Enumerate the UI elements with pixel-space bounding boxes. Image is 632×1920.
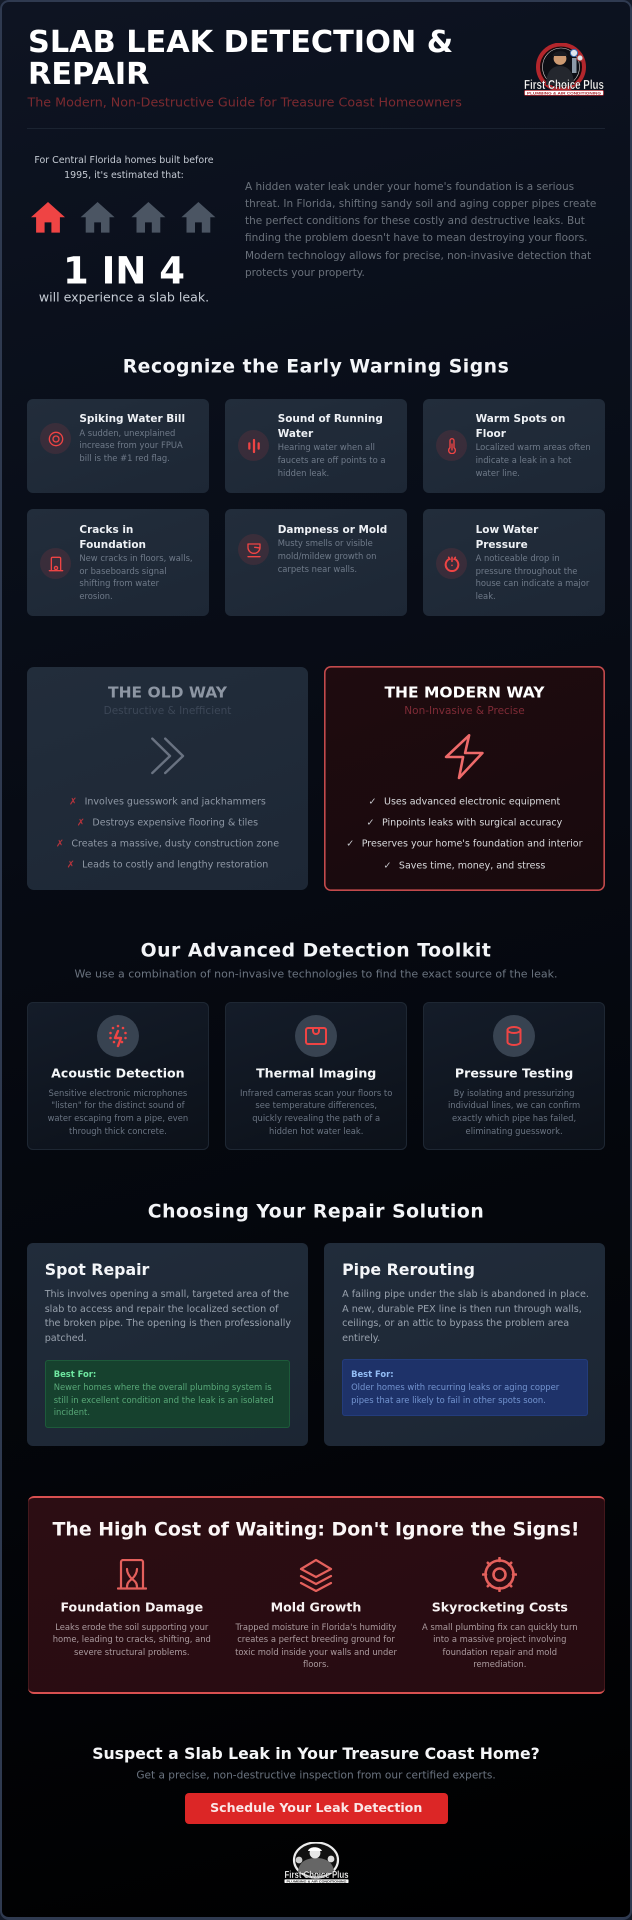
modern way list: ✓ Saves time, money, and stress: [383, 860, 545, 871]
modern way list: ✓ Preserves your home's foundation and interior: [346, 839, 583, 850]
stat block: 1 in 4: [31, 155, 216, 304]
panel: the modern way: [324, 666, 605, 891]
modern way list: ✓ Uses advanced electronic equipment: [369, 796, 560, 807]
panel: high cost of waiting: [28, 1496, 605, 1694]
cost item text: creates a perfect breeding ground for: [237, 1634, 395, 1644]
solution text: [342, 1289, 589, 1344]
card title: Water: [278, 428, 313, 440]
solution text: the broken pipe. The opening is then professionally: [45, 1318, 291, 1329]
button: schedule: Schedule Your Leak Detection: [210, 1800, 422, 1815]
cost item text: [422, 1622, 578, 1669]
icon: foundation: [40, 548, 71, 579]
card text: faucets are off points to a: [278, 455, 386, 465]
best for: blue callout: Best For:: [351, 1369, 394, 1379]
heading: repair solution: Choosing Your Repair Solution: [148, 1201, 484, 1222]
tool text: water escaping from a pipe, even: [48, 1113, 188, 1123]
solution text: This involves opening a small, targeted area of the: [45, 1289, 289, 1300]
card title: Cracks in: [79, 524, 133, 536]
cost item title: Foundation Damage: [60, 1600, 203, 1615]
intro paragraph: protects your property.: [245, 267, 365, 279]
tool text: [448, 1088, 580, 1136]
tool text: quickly revealing the path of a: [252, 1113, 380, 1123]
cost item text: remediation.: [473, 1659, 526, 1669]
tool text: [48, 1088, 188, 1136]
logo: First Choice Plus: PLUMBING & AIR CONDITIONING: [527, 91, 601, 95]
icon: acoustic sensor: [97, 1015, 139, 1057]
card text: [79, 553, 193, 601]
best for: green callout: [45, 1360, 290, 1428]
call to action text: Get a precise, non-destructive inspection from our certified experts.: [136, 1770, 496, 1782]
intro paragraph: the perfect conditions for these costly and destructive leaks. But: [245, 215, 585, 227]
card: acoustic detection: [27, 1002, 209, 1150]
modern way list: ✓ Pinpoints leaks with surgical accuracy: [366, 818, 562, 829]
header title: [28, 25, 453, 92]
card text: [79, 428, 183, 463]
card title: Pressure: [476, 539, 528, 551]
best for: green callout: incident.: [54, 1407, 90, 1417]
tool text: Infrared cameras scan your floors to: [240, 1088, 392, 1098]
card text: water line.: [476, 468, 520, 478]
intro paragraph: Modern technology allows for precise, non-invasive detection that: [245, 250, 591, 262]
card text: shifting from water: [79, 578, 159, 588]
tool text: individual lines, we can confirm: [448, 1100, 580, 1110]
card text: hidden leak.: [278, 468, 329, 478]
panel: spot repair: [27, 1243, 308, 1446]
card text: mold/mildew growth on: [278, 551, 376, 561]
cost item text: Leaks erode the soil supporting your: [55, 1622, 208, 1632]
panel: the old way: [27, 667, 308, 890]
card text: A noticeable drop in: [476, 553, 560, 563]
tool text: "listen" for the distinct sound of: [51, 1100, 185, 1110]
tool title: Pressure Testing: [455, 1066, 573, 1081]
solution text: ceilings, or an attic to bypass the problem area: [342, 1318, 569, 1329]
icon: double chevron: [151, 737, 184, 774]
card text: leak.: [476, 591, 496, 601]
card text: house can indicate a major: [476, 578, 589, 588]
cost heading: The High Cost of Waiting: Don't Ignore the Signs!: [52, 1519, 579, 1541]
card title: [79, 524, 146, 551]
stat intro text: For Central Florida homes built before: [34, 155, 214, 166]
old way list: ✗ Leads to costly and lengthy restoration: [67, 859, 268, 870]
tool text: exactly which pipe has failed,: [452, 1113, 576, 1123]
intro paragraph: finding the problem doesn't have to mean destroying your floors.: [245, 232, 588, 244]
header subtitle: The Modern, Non-Destructive Guide for Treasure Coast Homeowners: [28, 95, 462, 110]
icon: gear: [482, 1557, 517, 1592]
card text: New cracks in floors, walls,: [79, 553, 193, 563]
card text: Musty smells or visible: [278, 538, 373, 548]
tool title: Thermal Imaging: [256, 1066, 376, 1081]
cost item text: Trapped moisture in Florida's humidity: [236, 1622, 396, 1632]
best for: green callout: Newer homes where the overall plumbing system is: [54, 1382, 272, 1392]
intro paragraph: [245, 181, 596, 279]
cost item text: home, leading to cracks, shifting, and: [53, 1634, 211, 1644]
best for: blue callout: Older homes with recurring leaks or aging copper: [351, 1382, 559, 1392]
toolkit subheading: We use a combination of non-invasive technologies to find the exact source of the leak.: [75, 968, 557, 981]
button: schedule: [185, 1793, 448, 1824]
card text: indicate a leak in a hot: [476, 455, 571, 465]
card: pressure testing: [423, 1002, 605, 1150]
card: low water pressure: [423, 509, 605, 616]
icon: pressure gauge: [436, 548, 467, 579]
card text: [476, 553, 590, 601]
card text: carpets near walls.: [278, 564, 357, 574]
card title: Warm Spots on: [476, 413, 565, 425]
card: warm spots: [423, 399, 605, 493]
stat caption: will experience a slab leak.: [39, 290, 209, 304]
card title: [278, 413, 383, 440]
intro paragraph: A hidden water leak under your home's foundation is a serious: [245, 181, 574, 193]
modern way subtitle: Non-Invasive & Precise: [404, 705, 525, 717]
old way subtitle: Destructive & Inefficient: [104, 704, 231, 716]
cost item text: severe structural problems.: [74, 1647, 190, 1657]
card title: Dampness or Mold: [278, 524, 387, 536]
header title: REPAIR: [28, 57, 150, 92]
card title: Spiking Water Bill: [79, 413, 185, 425]
tool text: [240, 1088, 392, 1136]
best for: blue callout: pipes that are likely to fail in other spots soon.: [351, 1395, 546, 1405]
card title: [476, 524, 538, 551]
stat number: 1 IN 4: [63, 250, 185, 292]
card: spiking water bill: [27, 399, 209, 493]
cost item text: toxic mold inside your walls and under: [235, 1647, 397, 1657]
card: cracks in foundation: [27, 509, 209, 616]
card title: Low Water: [476, 524, 538, 536]
card title: Foundation: [79, 539, 146, 551]
card text: or baseboards signal: [79, 566, 167, 576]
cost item title: Skyrocketing Costs: [432, 1600, 568, 1615]
best for: green callout: still in excellent condition and the leak is an isolated: [54, 1395, 274, 1405]
intro paragraph: threat. In Florida, shifting sandy soil and aging copper pipes create: [245, 198, 596, 210]
card text: [278, 442, 386, 478]
house icons row: [31, 202, 216, 233]
solution text: patched.: [45, 1333, 87, 1344]
icon: cup: [238, 534, 269, 565]
old way list: ✗ Creates a massive, dusty construction zone: [56, 838, 279, 849]
card: thermal imaging: [225, 1002, 407, 1150]
icon: lightning bolt: [444, 734, 484, 780]
card text: Localized warm areas often: [476, 442, 591, 452]
icon: target: [40, 423, 71, 454]
card title: Floor: [476, 428, 506, 440]
cost item title: Mold Growth: [271, 1600, 361, 1615]
old way title: THE OLD WAY: [108, 683, 227, 701]
old way list: [56, 796, 279, 870]
heading: detection toolkit: Our Advanced Detection Toolkit: [141, 941, 491, 962]
cost item text: floors.: [303, 1659, 329, 1669]
cost item text: [53, 1622, 211, 1657]
solution text: entirely.: [342, 1333, 380, 1344]
old way list: ✗ Destroys expensive flooring & tiles: [77, 817, 258, 828]
cost item text: into a massive project involving: [433, 1634, 566, 1644]
solution text: slab to access and repair the localized section of: [45, 1304, 279, 1315]
icon: cylinder: [493, 1015, 535, 1057]
call to action heading: Suspect a Slab Leak in Your Treasure Coast Home?: [92, 1744, 540, 1763]
tool text: By isolating and pressurizing: [454, 1088, 574, 1098]
card title: Sound of Running: [278, 413, 383, 425]
header title: SLAB LEAK DETECTION &: [28, 25, 453, 60]
icon: thermal camera: [295, 1015, 337, 1057]
icon: sound bars: [238, 430, 269, 461]
card text: A sudden, unexplained: [79, 428, 175, 438]
tool title: Acoustic Detection: [51, 1066, 185, 1081]
card text: [476, 442, 591, 478]
card text: pressure throughout the: [476, 566, 577, 576]
tool text: through thick concrete.: [69, 1126, 167, 1136]
card text: increase from your FPUA: [79, 440, 183, 450]
card text: Hearing water when all: [278, 442, 375, 452]
card: sound of running water: [225, 399, 407, 493]
icon: thermometer: [436, 430, 467, 461]
tool text: eliminating guesswork.: [466, 1126, 563, 1136]
card text: bill is the #1 red flag.: [79, 453, 170, 463]
card text: [278, 538, 376, 574]
heading: warning signs: Recognize the Early Warning Signs: [123, 357, 509, 378]
best for: green callout: Best For:: [54, 1369, 96, 1379]
cost item text: A small plumbing fix can quickly turn: [422, 1622, 578, 1632]
solution text: A new, durable PEX line is then run through walls,: [342, 1304, 582, 1315]
logo: footer monochrome: PLUMBING & AIR CONDITIONING: [286, 1879, 347, 1883]
old way list: ✗ Involves guesswork and jackhammers: [69, 796, 266, 807]
tool text: see temperature differences,: [255, 1100, 377, 1110]
tool text: hidden hot water leak.: [269, 1126, 363, 1136]
icon: foundation damage: [117, 1559, 147, 1590]
modern way list: [346, 796, 583, 871]
best for: blue callout: [342, 1359, 588, 1416]
solution text: [44, 1289, 291, 1344]
cost item text: [235, 1622, 397, 1669]
stat intro text: [34, 155, 214, 181]
logo: footer monochrome: [284, 1842, 348, 1883]
card text: erosion.: [79, 591, 113, 601]
solution title: Spot Repair: [45, 1260, 149, 1279]
card title: [476, 413, 565, 440]
modern way title: THE MODERN WAY: [384, 684, 544, 702]
cost item text: foundation repair and mold: [443, 1647, 557, 1657]
solution text: A failing pipe under the slab is abandoned in place.: [342, 1289, 589, 1300]
logo: First Choice Plus: [524, 43, 604, 96]
card: dampness or mold: [225, 509, 407, 616]
icon: layers: [300, 1558, 332, 1592]
panel: pipe rerouting: [324, 1243, 605, 1446]
tool text: Sensitive electronic microphones: [49, 1088, 187, 1098]
solution title: Pipe Rerouting: [342, 1260, 475, 1279]
stat intro text: 1995, it's estimated that:: [64, 170, 184, 181]
